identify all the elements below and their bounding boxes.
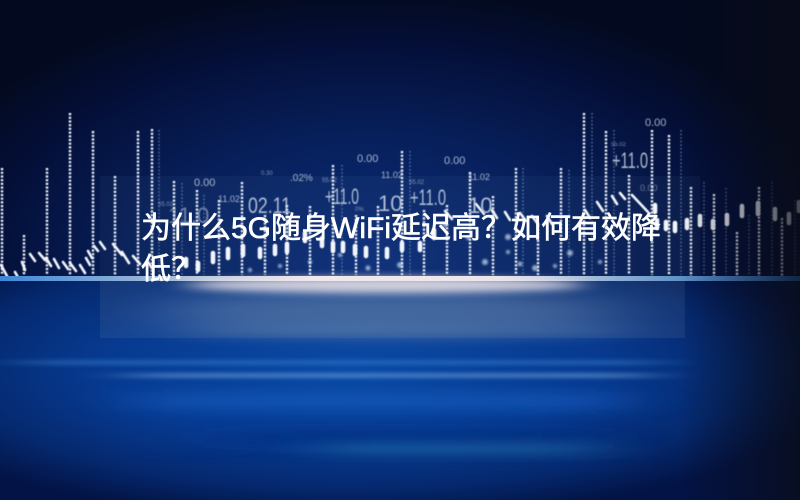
large readouts: 11.0 [168,203,209,228]
large readouts: 10 [468,193,492,218]
large readouts: +11.0 [612,148,648,173]
water base [0,278,800,500]
horizontal light streaks [20,326,660,459]
small readouts: 11.02 [218,194,240,204]
candlestick trend line [1,193,799,279]
dotted bar chart [2,113,795,277]
bright dotted bars [2,113,782,277]
screen reflection panel [100,280,685,338]
tiny readouts: 55.02 [611,142,627,148]
small readouts: 0.00 [194,177,215,189]
horizon light band [0,276,800,281]
thin candles [1,193,648,279]
right edge shade [680,0,800,500]
digital number readouts [158,117,666,228]
thick candles [186,202,799,270]
lower reflective surface [0,276,800,500]
small readouts: 11.02 [381,170,403,180]
small readouts: 0.00 [444,155,465,167]
tiny readouts: 55.02 [409,180,425,186]
tiny readouts [158,142,627,213]
grey central glow [160,290,620,334]
title: 为什么5G随身WiFi延迟高？如何有效降 [141,212,661,245]
title [141,212,661,286]
large readouts: 10 [378,191,402,216]
small readouts: 11.02 [468,172,490,182]
small readouts [194,117,666,204]
dim dotted bars [159,113,795,275]
small readouts: .02% [290,173,313,184]
glowing sparkles [248,222,602,272]
large readouts [168,148,648,228]
small readouts: 0.00 [645,117,666,129]
large readouts: 02.11 [248,193,291,218]
small readouts: 0.00 [357,153,378,165]
tiny readouts: 55.02 [158,202,174,208]
large readouts: +11.0 [410,185,446,210]
small readouts: 0.00 [640,183,658,193]
sky backdrop [0,0,800,278]
tiny readouts: 0.30 [261,171,273,177]
title: 低？ [141,253,201,286]
translucent screen panel [100,176,700,276]
tiny readouts: 55.02 [322,178,338,184]
large readouts: +11.0 [325,184,359,209]
tiny readouts: 0% [355,207,364,213]
horizon highlight [185,277,585,293]
